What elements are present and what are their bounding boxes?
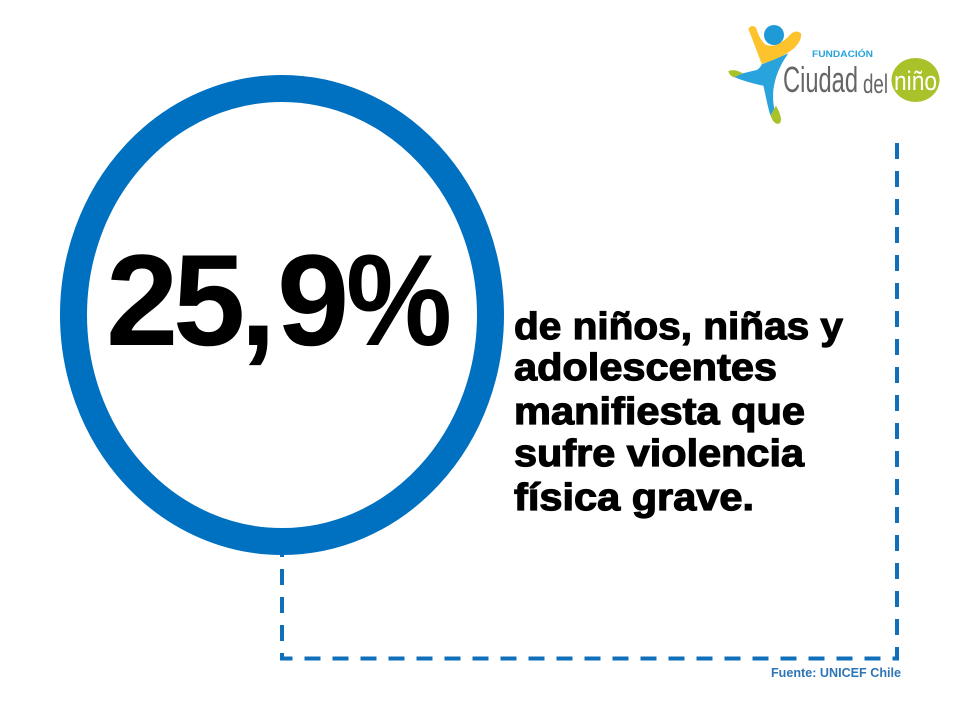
logo badge: niño bbox=[892, 58, 940, 102]
logo word: FUNDACIÓN: FUNDACIÓN bbox=[812, 48, 873, 60]
dashed connector line bbox=[282, 142, 897, 658]
logo figure: head bbox=[764, 25, 784, 45]
logo word: niño: niño bbox=[894, 66, 937, 96]
description text: adolescentes bbox=[514, 347, 777, 389]
logo figure bbox=[728, 25, 801, 124]
description text: manifiesta que bbox=[514, 391, 805, 433]
description text: de niños, niñas y bbox=[514, 306, 843, 348]
description text: física grave. bbox=[514, 477, 754, 519]
logo word: del: del bbox=[863, 69, 888, 99]
main statistic: 25,9 bbox=[106, 227, 349, 373]
logo figure: arms bbox=[748, 26, 801, 64]
description text bbox=[514, 306, 843, 519]
ring around the percentage bbox=[74, 88, 490, 542]
main statistic: % bbox=[346, 227, 452, 373]
logo figure: green accents bbox=[728, 70, 781, 124]
logo: Fundación Ciudad del Niño bbox=[728, 25, 940, 124]
logo word: Ciudad: Ciudad bbox=[783, 59, 858, 100]
logo figure: body bbox=[734, 53, 788, 116]
description text: sufre violencia bbox=[514, 433, 805, 475]
source note: Fuente: UNICEF Chile bbox=[771, 665, 901, 680]
